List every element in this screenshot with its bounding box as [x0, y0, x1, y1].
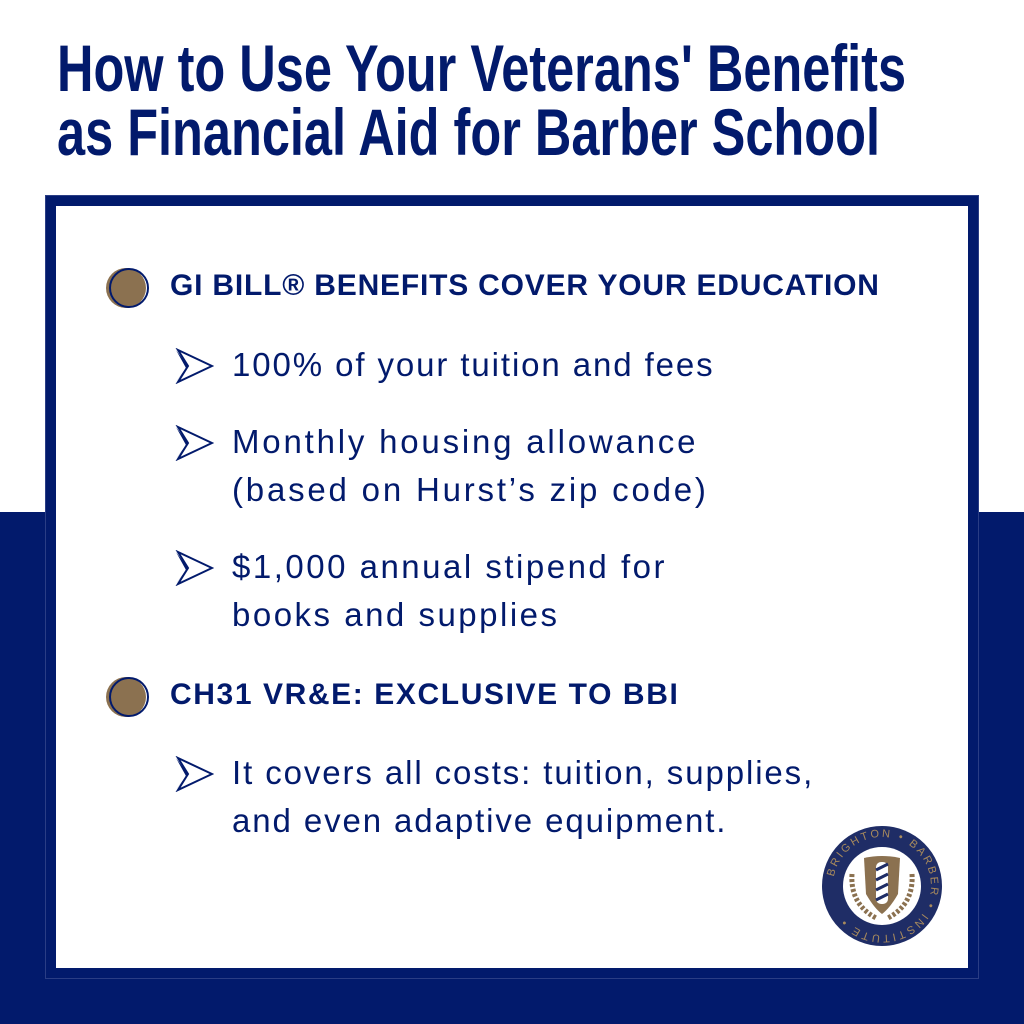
- icon: bullet circle 1: [106, 268, 149, 308]
- icon: chevron 3: [176, 550, 214, 586]
- text: stipend: $1,000 annual stipend for: [232, 548, 667, 585]
- title: as Financial Aid for Barber School: [57, 95, 880, 169]
- icon: chevron 1: [176, 348, 214, 384]
- text: tuition: 100% of your tuition and fees: [232, 346, 715, 383]
- icon: chevron 2: [176, 425, 214, 461]
- panel: benefits card: [46, 196, 978, 978]
- text: housing: [232, 423, 709, 508]
- title: [57, 31, 906, 169]
- text: all costs: It covers all costs: tuition, supplies,: [232, 754, 814, 791]
- heading: CH31: CH31 VR&E: EXCLUSIVE TO BBI: [170, 678, 679, 711]
- text: stipend: books and supplies: [232, 596, 560, 633]
- icon: chevron 4: [176, 756, 214, 792]
- text: all costs: [232, 754, 814, 839]
- title: How to Use Your Veterans' Benefits: [57, 31, 906, 105]
- text: housing: (based on Hurst’s zip code): [232, 471, 709, 508]
- heading: GI Bill: GI BILL® BENEFITS COVER YOUR EDUCATION: [170, 269, 880, 302]
- logo: Brighton Barber Institute: BRIGHTON • BARBER • INSTITUTE •: [826, 829, 939, 943]
- text: all costs: and even adaptive equipment.: [232, 802, 727, 839]
- text: stipend: [232, 548, 667, 633]
- text: housing: Monthly housing allowance: [232, 423, 698, 460]
- icon: bullet circle 2: [106, 677, 149, 717]
